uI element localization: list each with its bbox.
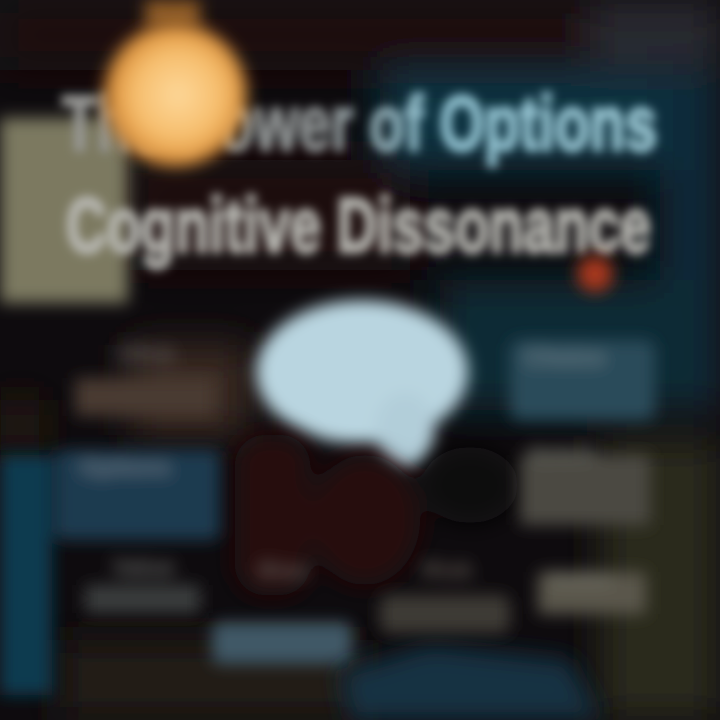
label background	[510, 340, 655, 420]
panel: left upper label	[75, 337, 215, 416]
label text: Beliefs	[530, 443, 596, 465]
far-left blue strip	[0, 455, 52, 695]
label text: Action	[550, 568, 612, 590]
icon: red dot	[577, 256, 613, 292]
panel: beige left block	[0, 118, 128, 303]
panel: right middle label	[520, 443, 650, 525]
body text	[75, 378, 215, 416]
label background	[212, 622, 352, 664]
panel: bottom right centre label	[380, 557, 510, 633]
label heading: Bias	[258, 557, 309, 584]
bulb cap	[145, 0, 200, 28]
label text: Choice	[525, 344, 605, 371]
bubble tail	[375, 392, 435, 468]
icon: light bulb	[103, 0, 247, 167]
label background	[538, 572, 646, 614]
bulb glow	[103, 23, 247, 167]
label background	[380, 595, 510, 633]
figures: dark heads and bodies	[235, 435, 518, 595]
panel: left lower label	[85, 554, 200, 613]
label background	[85, 585, 200, 613]
dark figure left	[235, 435, 310, 595]
panel: left middle label	[0, 450, 220, 695]
label background	[520, 455, 650, 525]
dark figure centre	[310, 455, 420, 585]
bubble body	[256, 300, 468, 444]
label text: Options	[80, 454, 171, 481]
panel: bottom dark blue band	[340, 645, 600, 720]
title	[62, 79, 657, 269]
panel: bottom centre label	[212, 557, 352, 664]
panel: right upper label	[510, 340, 655, 420]
panel: right lower label	[538, 568, 646, 614]
label heading: Risk	[422, 557, 473, 584]
dark figure right	[422, 447, 518, 523]
label background	[55, 450, 220, 540]
label text: Value	[112, 554, 175, 581]
heading text: Idea	[118, 337, 174, 368]
icon: speech bubble brain	[256, 300, 468, 468]
